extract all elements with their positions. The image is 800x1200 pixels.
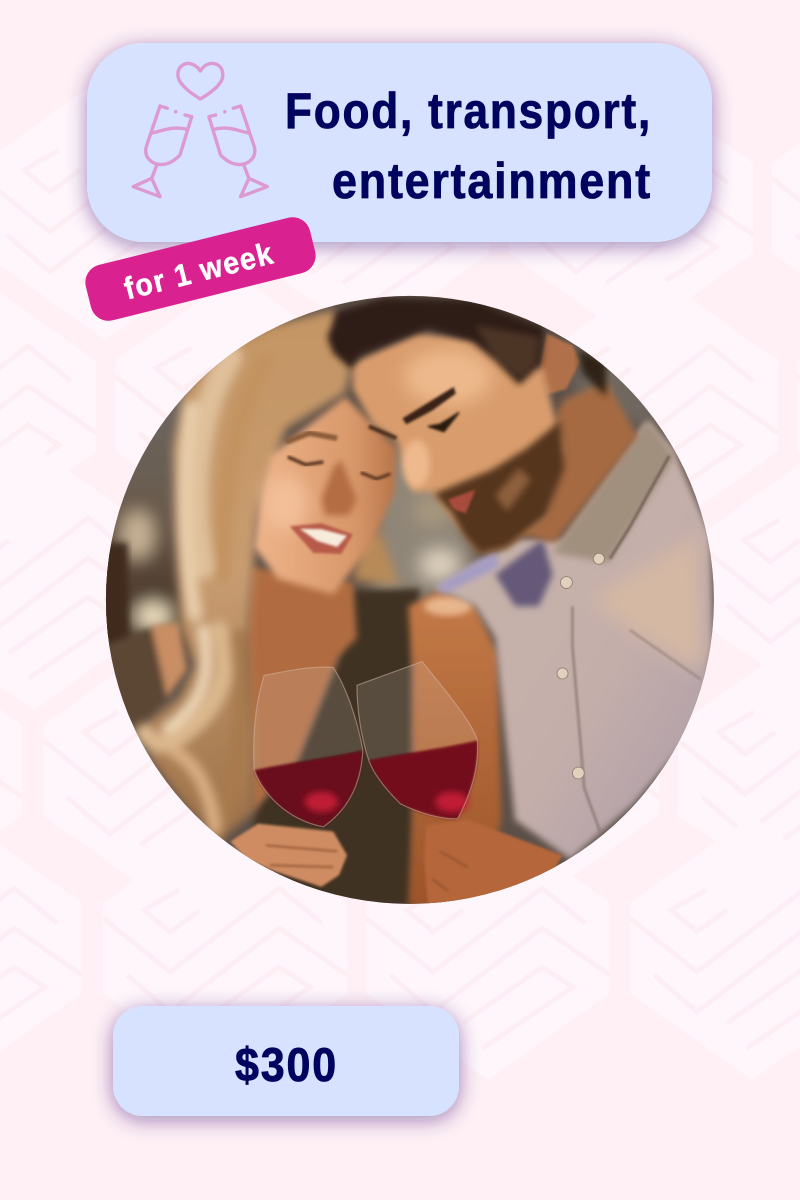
heading: entertainment bbox=[332, 153, 652, 209]
icon: champagne glasses with heart bbox=[133, 63, 267, 197]
badge: for 1 week: for 1 week bbox=[120, 235, 277, 306]
photo backdrop bbox=[100, 337, 677, 646]
man's shirt bbox=[436, 420, 713, 859]
woman's neck and chest bbox=[246, 567, 357, 812]
shirt buttons bbox=[557, 553, 604, 779]
man's hair bbox=[327, 298, 545, 385]
man's face bbox=[352, 333, 564, 554]
heading bbox=[285, 83, 652, 209]
photo: couple toasting with red wine bbox=[100, 290, 720, 910]
wine glasses bbox=[230, 662, 563, 907]
price value: $300 bbox=[235, 1038, 338, 1091]
price panel bbox=[113, 1006, 459, 1116]
woman's clothes bbox=[104, 588, 420, 907]
woman's hair bbox=[140, 310, 398, 841]
header panel bbox=[87, 43, 712, 242]
woman's face bbox=[254, 397, 396, 594]
man's neck and ear bbox=[511, 381, 638, 543]
heading: Food, transport, bbox=[285, 83, 652, 139]
hands bbox=[230, 824, 347, 887]
woman's arm bbox=[408, 590, 501, 907]
badge: for 1 week bbox=[82, 213, 319, 325]
